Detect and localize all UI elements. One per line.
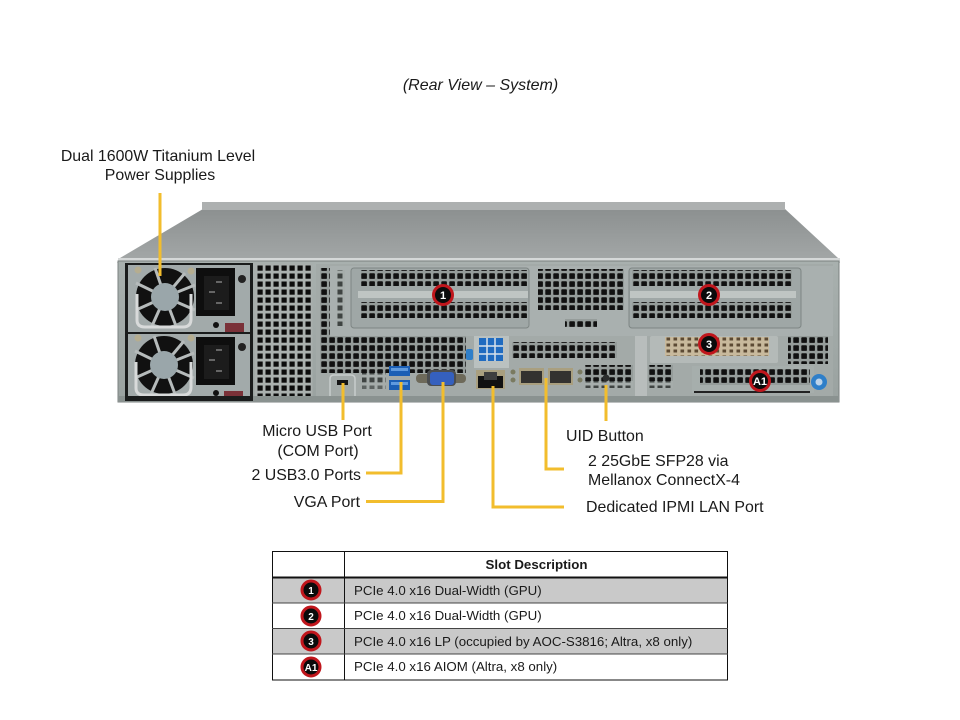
label: power supplies: Dual 1600W Titanium Level [61, 148, 255, 165]
badge: table row 4: A1 [305, 663, 318, 674]
slot 2 bracket [629, 268, 801, 328]
server chassis rear view [117, 202, 840, 402]
leader: IPMI LAN [493, 386, 564, 507]
chassis top lid [117, 209, 840, 263]
badge: slot 1 on chassis [434, 286, 452, 304]
row 4 text: PCIe 4.0 x16 AIOM (Altra, x8 only) [354, 659, 557, 674]
UID status light [602, 374, 610, 382]
centre vent [538, 269, 624, 310]
label: SFP28: Mellanox ConnectX-4 [588, 472, 740, 489]
power supply bay [125, 263, 253, 401]
slot 1 bracket [337, 268, 529, 328]
micro USB port [330, 375, 355, 396]
label: SFP28: 2 25GbE SFP28 via [588, 453, 729, 470]
badge: table row 2: 2 [308, 612, 314, 623]
badge: slot 2 on chassis: 2 [706, 290, 712, 302]
badge: slot 3 on chassis: 3 [706, 339, 712, 351]
AIOM slot [692, 366, 814, 393]
lower vent grid [320, 336, 466, 373]
VGA port [416, 370, 466, 386]
label: VGA port: VGA Port [294, 494, 361, 511]
badge: table row 2 [302, 607, 320, 625]
row shading [272, 578, 728, 603]
leader: SFP28 [546, 378, 564, 469]
row 1 text: PCIe 4.0 x16 Dual-Width (GPU) [354, 583, 542, 598]
release tab 1 [225, 323, 244, 332]
fan 2 [134, 334, 194, 395]
blue riser connector [466, 335, 509, 368]
row 2 text: PCIe 4.0 x16 Dual-Width (GPU) [354, 608, 542, 623]
lower motherboard area [316, 264, 833, 398]
bracket side holes [337, 270, 345, 326]
base edge [118, 396, 839, 402]
badge: table row 1 [302, 581, 320, 599]
power supply 1 [128, 265, 250, 332]
leader: micro USB [342, 383, 344, 420]
badge: table row 3: 3 [308, 637, 314, 648]
upper right vent [817, 268, 831, 334]
table header: Slot Description [486, 557, 587, 572]
chassis rear face [118, 261, 839, 402]
fan 1 [134, 266, 195, 327]
riser bracket frame [330, 266, 833, 336]
row 3 text: PCIe 4.0 x16 LP (occupied by AOC-S3816; Altra, x8 only) [354, 634, 692, 649]
badge: slot 1 on chassis: 1 [440, 290, 446, 302]
label: USB3.0 ports: 2 USB3.0 Ports [251, 467, 361, 484]
badge: table row 3 [302, 632, 320, 650]
label: micro USB port: Micro USB Port [262, 423, 372, 440]
vertical divider [635, 336, 647, 396]
lower vents near ports [585, 365, 633, 381]
title: (Rear View – System) [403, 77, 558, 94]
power inlet 2 [196, 337, 246, 396]
badge: slot 2 on chassis [700, 286, 718, 304]
callout leaders [160, 193, 606, 507]
label: UID button: UID Button [566, 428, 644, 445]
leader: UID button [604, 385, 608, 421]
badge: table row 4 [302, 658, 320, 676]
badge: table row 1: 1 [308, 586, 314, 597]
badge: slot 3 on chassis [700, 334, 718, 354]
leader: USB3.0 [366, 382, 401, 473]
badge: slot A1 on chassis [750, 372, 770, 390]
label: IPMI LAN port: Dedicated IPMI LAN Port [586, 499, 764, 516]
badge: slot A1 on chassis: A1 [753, 376, 767, 388]
I/O grid [512, 342, 617, 358]
leader: power supplies [158, 193, 162, 276]
power supply 2 [128, 334, 250, 401]
IPMI LAN port [476, 370, 516, 389]
slot description table [272, 551, 728, 680]
UID button [811, 374, 827, 390]
USB 3.0 ports [389, 366, 410, 390]
leader: VGA [366, 382, 443, 502]
power inlet 1 [196, 268, 246, 328]
release tab 2 [224, 391, 243, 401]
label: power supplies: Power Supplies [105, 167, 215, 184]
label: micro USB port: (COM Port) [277, 443, 359, 460]
SFP28 ports [519, 368, 582, 385]
low profile card slot 3 [650, 336, 778, 363]
